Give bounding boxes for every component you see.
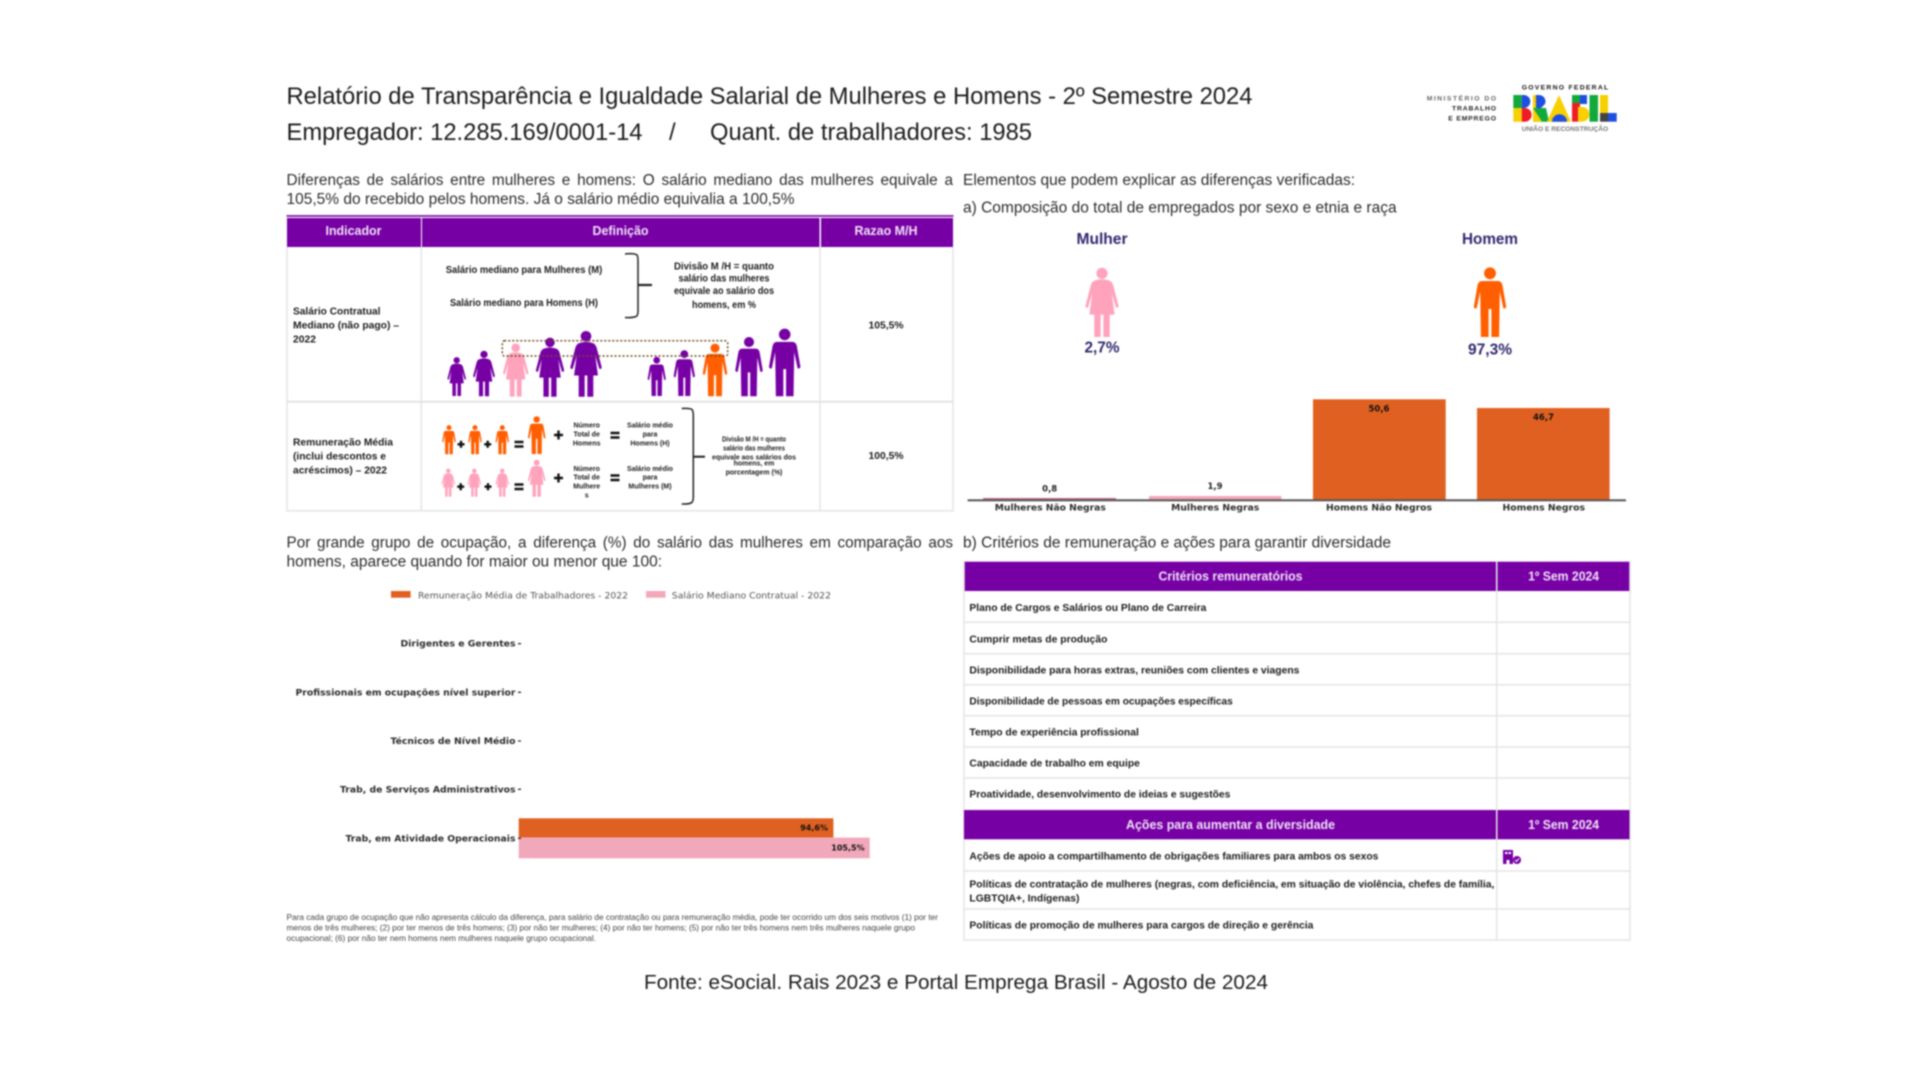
bar chart: composição por sexo e raça: Mulheres Não Negras — [995, 504, 1106, 514]
title: Empregador: 12.285.169/0001-14 — [286, 119, 642, 146]
text block: grande grupo de ocupação — [286, 534, 953, 570]
row 1 division note: equivale ao salário dos — [674, 286, 775, 297]
median highlight box — [502, 341, 728, 356]
bar chart: ocupação: Trab, em Atividade Operacionais — [346, 835, 516, 845]
title: Quant. de trabalhadores: 1985 — [710, 119, 1032, 146]
action rows — [969, 852, 1495, 932]
bar chart: ocupação: Profissionais em ocupações nível superior — [296, 689, 516, 699]
women average formula: Salário médio — [627, 466, 673, 473]
men average formula: Salário médio — [627, 423, 673, 430]
bar chart: composição por sexo e raça: Homens Negros — [1502, 504, 1585, 514]
women average formula: para — [643, 475, 657, 482]
men average formula: Homens — [573, 441, 601, 448]
row 1 label — [293, 305, 399, 345]
title: / — [669, 119, 676, 146]
row 2 label — [293, 437, 393, 477]
row 1 division note: Divisão M /H = quanto — [674, 261, 774, 272]
criteria rows: Disponibilidade de pessoas em ocupações específicas — [969, 696, 1233, 707]
row 1 definition labels: Salário mediano para Homens (H) — [450, 298, 598, 309]
row 2 label: Remuneração Média — [293, 437, 393, 449]
table header: critérios remuneratórios — [964, 562, 1630, 591]
row 1 bracket — [625, 254, 652, 318]
logo: ministério and governo federal: GOVERNO FEDERAL — [1522, 84, 1608, 91]
text block: diferenças de salários: Diferenças de salários entre mulheres e homens: O salário mediano das mulheres equivale a — [286, 172, 953, 189]
criteria rows: Disponibilidade para horas extras, reuniões com clientes e viagens — [969, 665, 1300, 676]
table header: ações diversidade: 1º Sem 2024 — [1528, 817, 1600, 832]
women average formula: Número — [573, 466, 600, 473]
icon: building with check — [1503, 850, 1521, 864]
text block: elementos: Elementos que podem explicar as diferenças verificadas: — [963, 172, 1355, 189]
men average formula: Total de — [574, 432, 600, 439]
row 2 division note: porcentagem (%) — [726, 469, 782, 476]
heading: composição: a) Composição do total de empregados por sexo e etnia e raça — [963, 200, 1397, 217]
bar chart: ocupação — [296, 640, 870, 858]
action rows: Políticas de promoção de mulheres para cargos de direção e gerência — [969, 921, 1314, 932]
women average formula: Total de — [574, 475, 600, 482]
women average formula: Mulheres (M) — [628, 483, 672, 490]
row 2 division note — [712, 437, 796, 476]
footnote: Para cada grupo de ocupação que não apresenta cálculo da diferença, para salário de contratação ou para remuneração média, pode ter ocorrido um dos seis motivos (1) por ter — [286, 913, 938, 922]
table header: ações diversidade: Ações para aumentar a diversidade — [1126, 817, 1335, 832]
row 1 definition labels — [446, 265, 602, 309]
bar chart: ocupação: 105,5% — [831, 844, 865, 853]
criteria rows: Plano de Cargos e Salários ou Plano de Carreira — [969, 603, 1207, 614]
row 2 bracket — [682, 408, 705, 504]
row 2 division note: Divisão M /H = quanto — [722, 437, 786, 444]
row 1 label: Mediano (não pago) – — [293, 319, 399, 331]
bar chart: composição por sexo e raça: Mulheres Negras — [1171, 504, 1259, 514]
row 1 label: 2022 — [293, 333, 316, 345]
panel: critérios table — [964, 561, 1630, 940]
criteria rows: Tempo de experiência profissional — [969, 727, 1139, 738]
bar chart: composição por sexo e raça: 46,7 — [1533, 413, 1554, 423]
bar chart: composição por sexo e raça: 1,9 — [1207, 482, 1223, 492]
row 2 division note: homens, em — [734, 461, 774, 468]
table header: critérios remuneratórios: 1º Sem 2024 — [1528, 568, 1600, 583]
bar chart: composição por sexo e raça: 0,8 — [1042, 485, 1057, 495]
bar chart: ocupação: Dirigentes e Gerentes — [400, 640, 516, 650]
table header: indicador, definição, razão: Indicador — [326, 224, 382, 238]
row 1 division note: homens, em % — [692, 300, 756, 311]
bar chart: ocupação: Trab, de Serviços Administrativos — [340, 786, 516, 796]
text block: diferenças de salários — [286, 172, 953, 208]
row 2 division note: salário das mulheres — [723, 446, 785, 453]
bar chart: ocupação: Técnicos de Nível Médio — [390, 736, 516, 747]
panel: indicator table — [286, 215, 954, 511]
bar chart: composição por sexo e raça: Homens Não Negros — [1326, 504, 1432, 514]
logo: ministério and governo federal: TRABALHO — [1452, 106, 1496, 113]
row 1 division note — [674, 261, 775, 311]
criteria rows: Cumprir metas de produção — [969, 634, 1107, 645]
criteria rows: Proatividade, desenvolvimento de ideias e sugestões — [969, 790, 1231, 800]
logo: ministério and governo federal — [1427, 84, 1617, 133]
row 2 division note: equivale aos salários dos — [712, 454, 796, 461]
title: Relatório de Transparência e Igualdade Salarial de Mulheres e Homens - 2º Semestre 2024 — [286, 83, 1252, 110]
action rows: Políticas de contratação de mulheres (negras, com deficiência, em situação de violência, chefes de família, — [969, 879, 1495, 890]
logo: ministério and governo federal: E EMPREGO — [1448, 116, 1496, 123]
men average formula: para — [643, 432, 657, 439]
legend: Remuneração Média de Trabalhadores - 2022 — [418, 590, 628, 601]
footnote — [286, 913, 938, 943]
bar chart: ocupação: 94,6% — [800, 824, 828, 833]
action rows: LGBTQIA+, Indígenas) — [969, 893, 1079, 904]
action rows: Ações de apoio a compartilhamento de obrigações familiares para ambos os sexos — [969, 852, 1379, 863]
bar chart: composição por sexo e raça: 50,6 — [1369, 405, 1390, 415]
row 1 definition labels: Salário mediano para Mulheres (M) — [446, 265, 602, 276]
icon: women row with median — [447, 331, 602, 397]
icon group: mulher: Mulher — [1076, 231, 1128, 248]
footnote: ocupacional; (6) por não ter nem homens nem mulheres naquele grupo ocupacional. — [286, 934, 596, 943]
bar chart: composição por sexo e raça — [968, 399, 1626, 514]
row 1 label: Salário Contratual — [293, 305, 381, 317]
women average formula — [442, 460, 673, 499]
icon group: homem — [1462, 231, 1518, 358]
men average formula — [442, 416, 673, 454]
table header: indicador, definição, razão: Razao M/H — [854, 224, 918, 238]
table header: ações diversidade — [964, 810, 1630, 839]
criteria rows — [969, 603, 1300, 800]
women average formula: Mulhere — [573, 483, 600, 490]
row 2 label: (inclui descontos e — [293, 451, 386, 463]
text block: diferenças de salários: 105,5% do recebido pelos homens. Já o salário médio equivalia a 100,5% — [286, 191, 795, 208]
criteria rows: Capacidade de trabalho em equipe — [969, 758, 1140, 769]
men average formula: Homens (H) — [630, 441, 670, 448]
men average formula: Número — [573, 423, 600, 430]
footnote: menos de três mulheres; (2) por ter menos de três homens; (3) por não ter mulheres; (4) por não ter homens; (5) por não ter três homens nem três mulheres naquele grupo — [286, 924, 915, 933]
row 2 label: acréscimos) – 2022 — [293, 465, 387, 477]
icon group: homem: Homem — [1462, 231, 1518, 248]
row 1 value: 105,5% — [868, 320, 904, 331]
icon group: mulher: 2,7% — [1084, 340, 1120, 357]
title — [286, 83, 1252, 146]
logo: ministério and governo federal: UNIÃO E RECONSTRUÇÃO — [1522, 124, 1608, 133]
icon: men row with median — [648, 329, 800, 396]
text block: grande grupo de ocupação: Por grande grupo de ocupação, a diferença (%) do salário das mulheres em comparação aos — [286, 534, 953, 551]
heading: critérios: b) Critérios de remuneração e ações para garantir diversidade — [963, 534, 1391, 551]
icon group: homem: 97,3% — [1468, 341, 1512, 358]
legend — [391, 590, 831, 601]
women average formula: s — [585, 492, 589, 499]
row 1 division note: salário das mulheres — [678, 274, 770, 285]
table header: indicador, definição, razão — [287, 218, 953, 247]
legend: Salário Mediano Contratual - 2022 — [672, 590, 831, 601]
icon group: mulher — [1076, 231, 1128, 357]
text block: grande grupo de ocupação: homens, aparece quando for maior ou menor que 100: — [286, 553, 662, 570]
source: Fonte: eSocial. Rais 2023 e Portal Emprega Brasil - Agosto de 2024 — [644, 971, 1268, 994]
table header: critérios remuneratórios: Critérios remuneratórios — [1158, 568, 1302, 583]
row 2 value: 100,5% — [868, 451, 904, 462]
logo: ministério and governo federal: MINISTÉRIO DO — [1427, 94, 1496, 103]
table header: indicador, definição, razão: Definição — [592, 224, 649, 238]
